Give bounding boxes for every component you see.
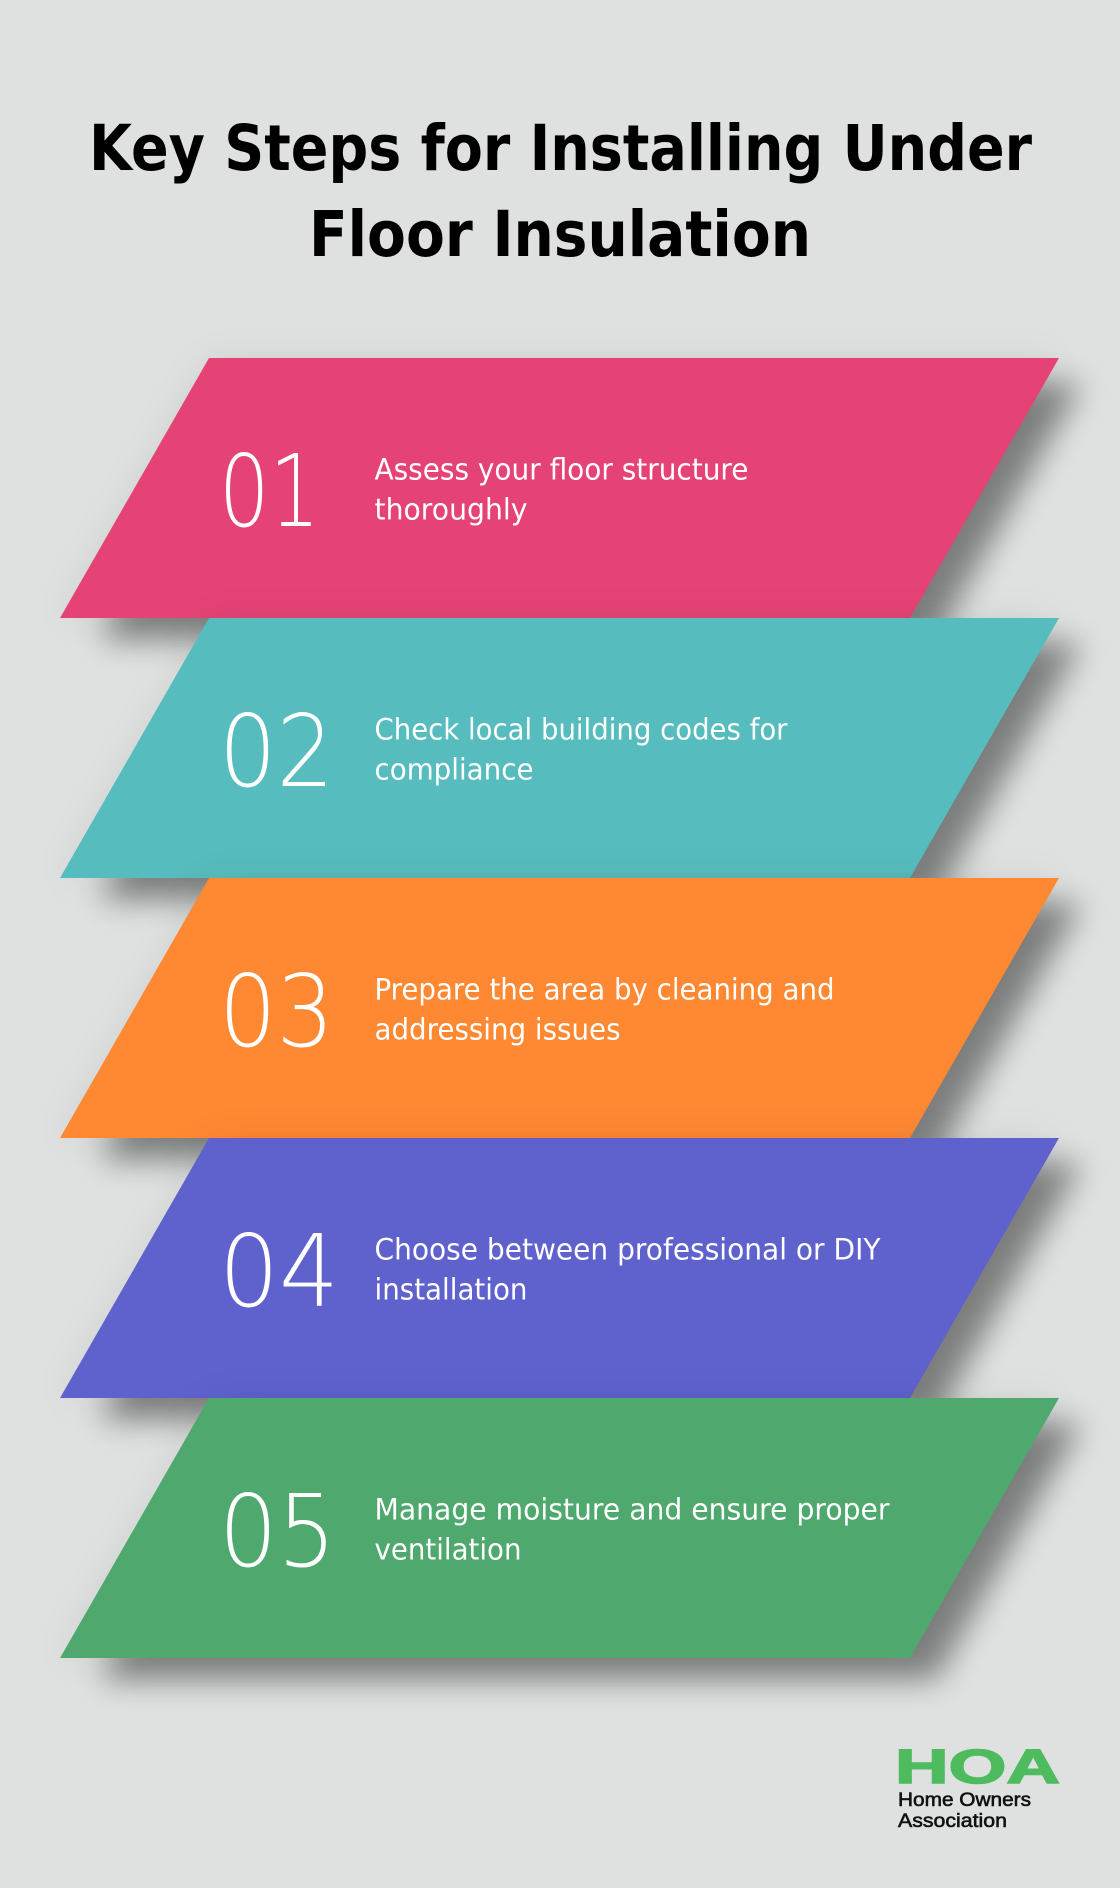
step 05 number: 05 [219,1473,336,1590]
step 03 text: Prepare the area by cleaning and [374,972,834,1006]
logo: HOA Home Owners Association [895,1741,1060,1832]
step 01 text [374,452,748,526]
step 02 text: Check local building codes for [374,712,788,746]
panel: step 03 [60,878,1082,1160]
step 03 text: addressing issues [374,1012,620,1046]
step 02 text: compliance [374,752,534,786]
step 05 text [374,1492,890,1566]
logo: HOA Home Owners Association: HOA [895,1741,1060,1794]
step 02 text [374,712,788,786]
step 03 number: 03 [219,953,334,1070]
panel: step 04 [60,1138,1082,1420]
panel: step 02 [60,618,1082,900]
step 01 text: thoroughly [374,492,528,526]
step 04 text [374,1232,881,1306]
step 03 text [374,972,834,1046]
panel: step 05 [60,1398,1082,1680]
step 01 text: Assess your floor structure [374,452,748,486]
step 05 text: ventilation [374,1532,522,1566]
step 04 text: Choose between professional or DIY [374,1232,881,1266]
panel: step 01 [60,358,1082,640]
step 04 number: 04 [219,1213,339,1330]
title: Floor Insulation [309,198,811,271]
step 04 text: installation [374,1272,528,1306]
step 01 number: 01 [219,433,320,550]
step 02 number: 02 [219,693,334,810]
step 05 text: Manage moisture and ensure proper [374,1492,890,1526]
logo: HOA Home Owners Association: Association [898,1810,1007,1832]
logo: HOA Home Owners Association: Home Owners [898,1789,1031,1811]
title [89,112,1032,271]
